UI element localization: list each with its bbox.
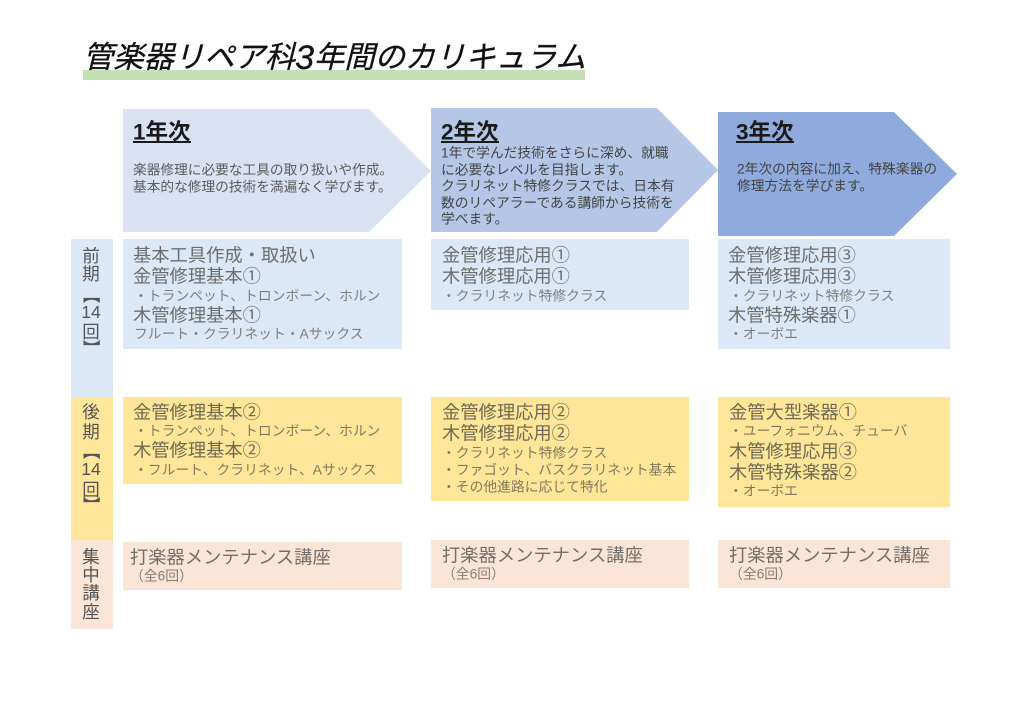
- panel: year 3 arrow: [718, 112, 957, 236]
- label: first term: 前: [82, 246, 100, 266]
- panel: year 3 first term: 木管修理応用③: [728, 266, 856, 286]
- panel: year 2 arrow: 数のリペアラーである講師から技術を: [441, 196, 674, 210]
- label: first term: [71, 239, 113, 397]
- panel: year 3 first term: [718, 239, 950, 349]
- panel: year 1 second term: ・フルート、クラリネット、Aサックス: [134, 462, 377, 478]
- panel: year 1 first term: ・トランペット、トロンボーン、ホルン: [134, 288, 380, 304]
- panel: year 3 intensive: [718, 540, 950, 588]
- panel: year 3 second term: ・ユーフォニウム、チューバ: [729, 424, 908, 438]
- panel: year 2 intensive: （全6回）: [442, 566, 505, 582]
- panel: year 3 arrow: 2年次の内容に加え、特殊楽器の: [737, 160, 937, 176]
- label: first term: 14: [81, 302, 101, 322]
- panel: year 2 second term: 木管修理応用②: [442, 422, 570, 444]
- panel: year 3 first term: ・クラリネット特修クラス: [729, 288, 894, 304]
- label: second term: 14: [81, 459, 101, 479]
- title with green underline: 管楽器リペア科3年間のカリキュラム: [83, 39, 586, 77]
- panel: year 1 intensive: 打楽器メンテナンス講座: [130, 546, 331, 568]
- panel: year 3 first term: 金管修理応用③: [728, 244, 856, 266]
- panel: year 1 arrow: 楽器修理に必要な工具の取り扱いや作成。: [133, 162, 393, 178]
- panel: year 3 intensive: 打楽器メンテナンス講座: [729, 544, 930, 566]
- label: first term: 【: [81, 286, 101, 304]
- panel: year 2 first term: ・クラリネット特修クラス: [442, 288, 607, 304]
- label: first term: 回: [82, 322, 100, 342]
- panel: year 1 arrow: 基本的な修理の技術を満遍なく学びます。: [133, 178, 392, 194]
- panel: year 1 first term: フルート・クラリネット・Aサックス: [134, 326, 364, 342]
- panel: year 2 arrow: 1年で学んだ技術をさらに深め、就職: [441, 146, 669, 160]
- panel: year 2 second term: ・ファゴット、バスクラリネット基本: [442, 462, 676, 478]
- label: second term: [71, 397, 113, 540]
- panel: year 3 intensive: （全6回）: [729, 566, 792, 582]
- panel: year 1 second term: 金管修理基本②: [133, 402, 261, 422]
- panel: year 3 second term: 木管特殊楽器②: [729, 462, 857, 482]
- label: second term: 【: [81, 442, 101, 460]
- panel: year 3 first term: 木管特殊楽器①: [728, 304, 856, 326]
- panel: year 3 second term: 金管大型楽器①: [729, 402, 857, 422]
- panel: year 2 intensive: [431, 540, 689, 588]
- label: intensive course: 集: [82, 547, 100, 567]
- panel: year 2 intensive: 打楽器メンテナンス講座: [442, 544, 643, 566]
- panel: year 3 second term: 木管修理応用③: [729, 440, 857, 462]
- panel: year 2 second term: [431, 397, 689, 501]
- panel: year 2 first term: 木管修理応用①: [442, 266, 570, 286]
- panel: year 1 first term: [123, 239, 402, 349]
- label: second term: 回: [82, 480, 100, 500]
- label: second term: 】: [81, 496, 101, 514]
- panel: year 2 second term: ・その他進路に応じて特化: [442, 480, 608, 494]
- panel: year 2 arrow: [431, 108, 718, 232]
- panel: year 1 arrow: 1年次: [133, 120, 191, 144]
- panel: year 1 intensive: [123, 542, 402, 590]
- panel: year 1 second term: ・トランペット、トロンボーン、ホルン: [134, 424, 380, 438]
- panel: year 2 second term: 金管修理応用②: [442, 402, 570, 422]
- panel: year 1 first term: 基本工具作成・取扱い: [133, 244, 316, 266]
- panel: year 3 second term: [718, 397, 950, 507]
- panel: year 1 second term: 木管修理基本②: [133, 440, 261, 460]
- label: intensive course: 座: [82, 602, 100, 622]
- panel: year 1 first term: 木管修理基本①: [133, 304, 261, 326]
- label: intensive course: [71, 540, 113, 629]
- panel: year 2 arrow: 2年次: [441, 120, 499, 144]
- panel: year 2 arrow: クラリネット特修クラスでは、日本有: [441, 178, 674, 194]
- panel: year 1 second term: [123, 397, 402, 484]
- panel: year 3 arrow: 3年次: [736, 120, 794, 144]
- label: first term: 】: [81, 339, 101, 357]
- panel: year 3 first term: ・オーボエ: [729, 326, 798, 342]
- panel: year 2 arrow: に必要なレベルを目指します。: [441, 162, 632, 178]
- panel: year 2 first term: 金管修理応用①: [442, 244, 570, 266]
- panel: year 1 first term: 金管修理基本①: [133, 266, 261, 286]
- panel: year 2 first term: [431, 239, 689, 310]
- label: first term: 期: [82, 264, 100, 284]
- label: intensive course: 中: [82, 565, 100, 585]
- label: second term: 後: [82, 402, 100, 422]
- label: second term: 期: [82, 422, 100, 442]
- panel: year 1 arrow: [123, 109, 431, 232]
- panel: year 2 second term: ・クラリネット特修クラス: [442, 446, 607, 460]
- panel: year 3 second term: ・オーボエ: [729, 484, 798, 498]
- label: intensive course: 講: [82, 583, 100, 603]
- panel: year 3 arrow: 修理方法を学びます。: [737, 178, 873, 194]
- panel: year 1 intensive: （全6回）: [130, 568, 193, 584]
- panel: year 2 arrow: 学べます。: [441, 212, 508, 226]
